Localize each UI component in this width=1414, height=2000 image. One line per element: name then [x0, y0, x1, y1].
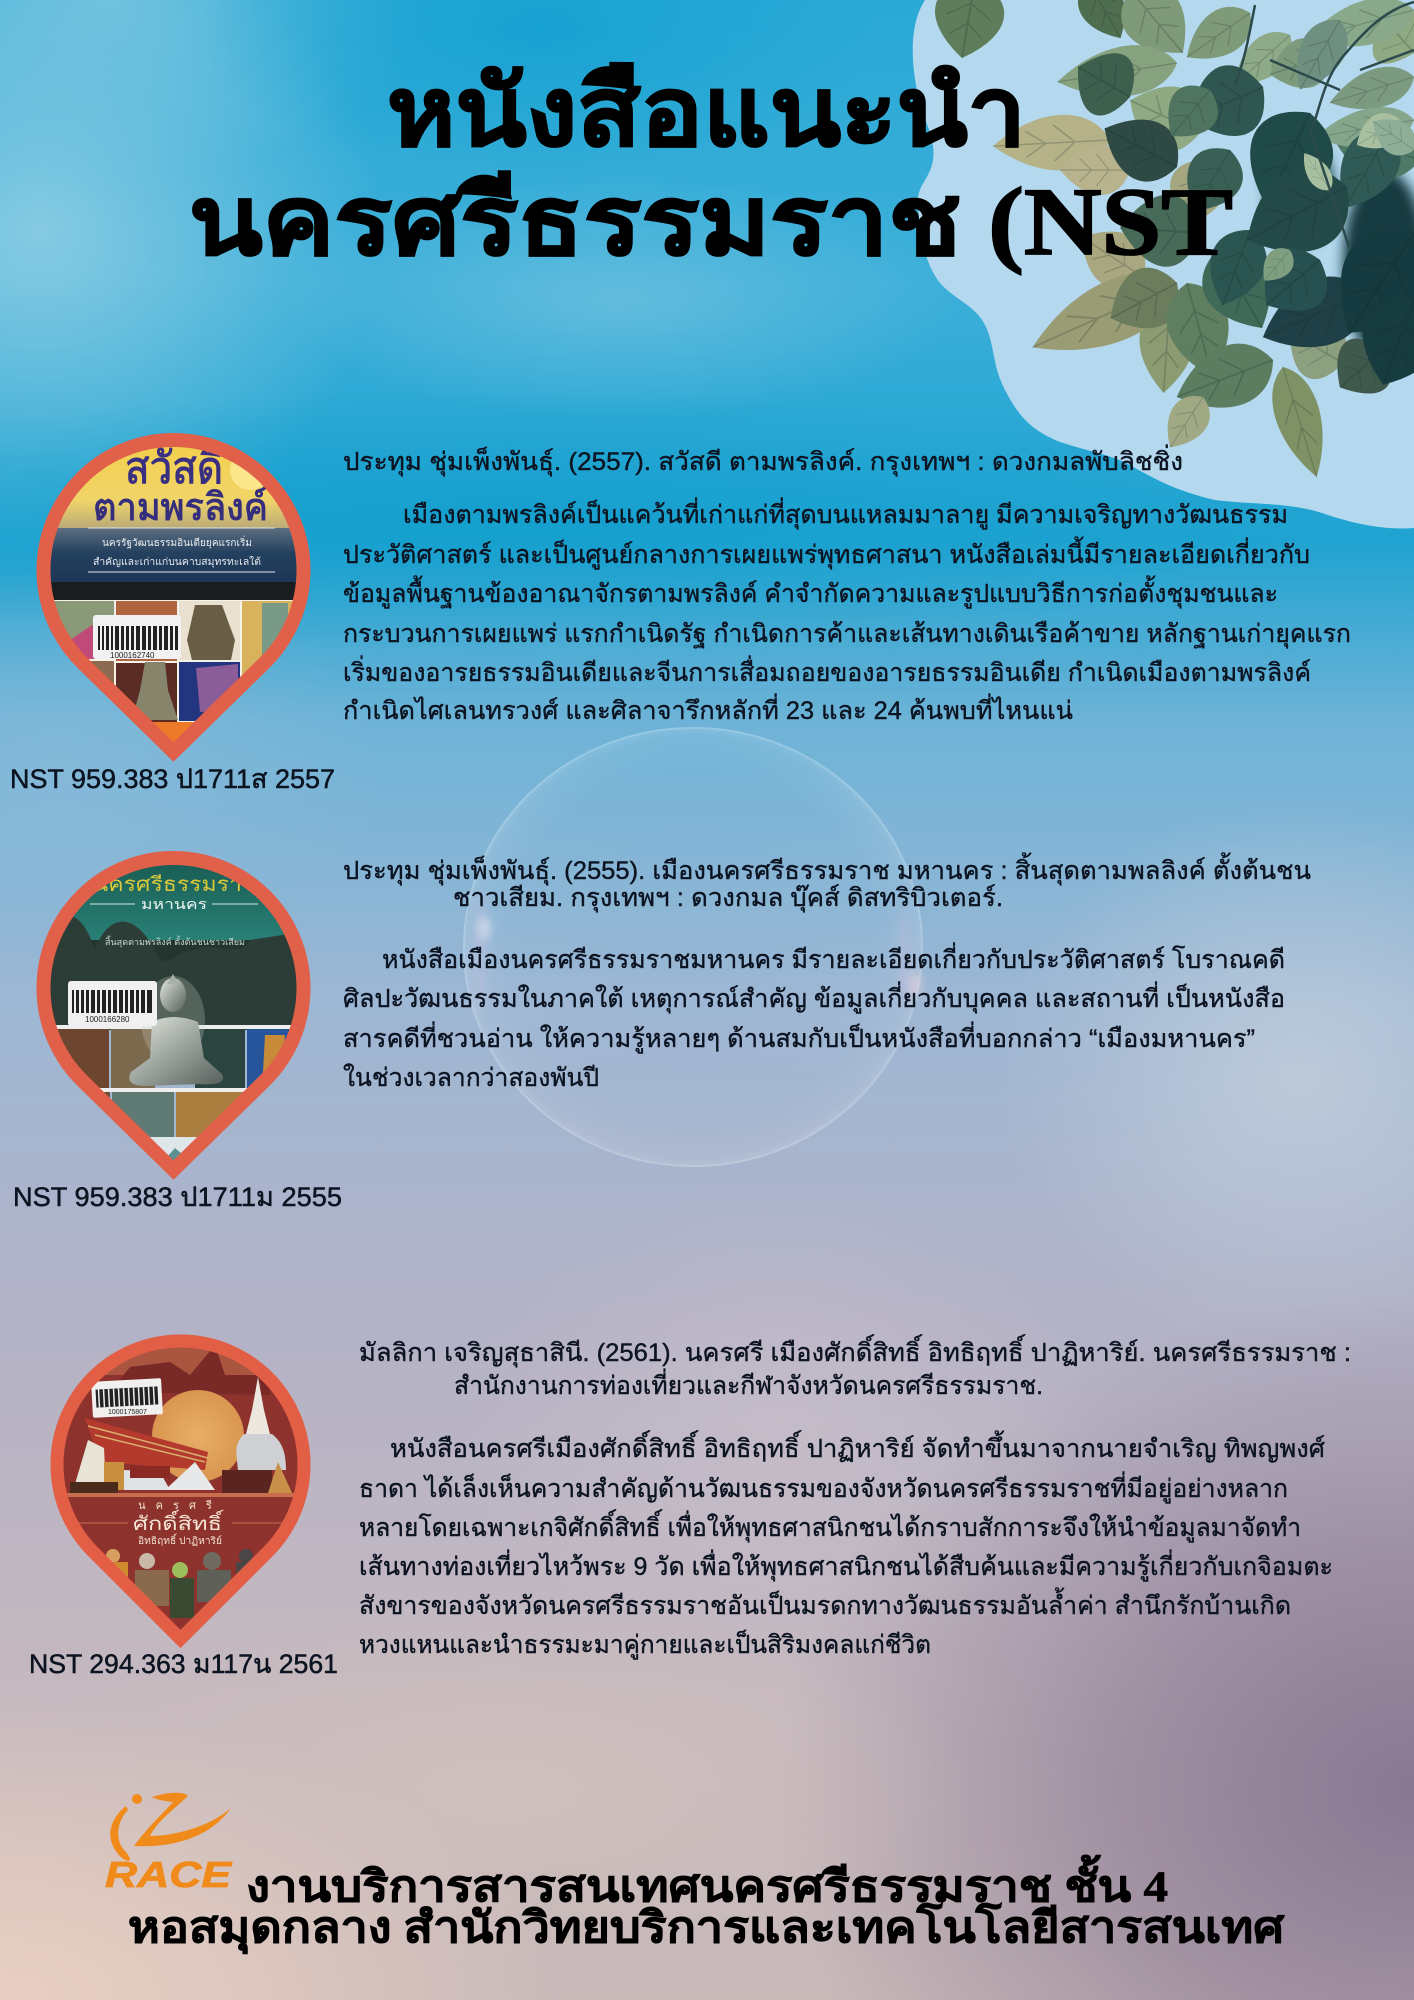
book cover pin 1: สวัสดิ	[125, 444, 223, 493]
book cover pin 3	[45, 1330, 315, 1645]
book cover pin 2: มหานคร	[141, 896, 208, 912]
footer text: งานบริการสารสนเทศนครศรีธรรมราช ชั้น 4	[246, 1854, 1168, 1911]
description 1	[343, 497, 1351, 725]
description 3: หวงแหนและนำธรรมะมาคู่กายและเป็นสิริมงคลแก่ชีวิต	[359, 1629, 931, 1660]
leaves	[928, 0, 1414, 483]
description 1: ประวัติศาสตร์ และเป็นศูนย์กลางการเผยแพร่พุทธศาสนา หนังสือเล่มนี้มีรายละเอียดเกี่ยวกับ	[343, 536, 1310, 570]
footer text: หอสมุดกลาง สำนักวิทยบริการและเทคโนโลยีสารสนเทศ	[128, 1901, 1285, 1955]
barcode: 1000175807	[108, 1409, 147, 1416]
description 1: ข้อมูลพื้นฐานข้องอาณาจักรตามพรลิงค์ คำจำกัดความและรูปแบบวิธีการก่อตั้งชุมชนและ	[343, 575, 1278, 609]
chedi	[222, 1377, 292, 1493]
description 3	[359, 1430, 1333, 1660]
description 1: กำเนิดไศเลนทรวงศ์ และศิลาจารึกหลักที่ 23 และ 24 ค้นพบที่ไหนแน่	[343, 693, 1073, 725]
call number 2: NST 959.383 ป1711ม 2555	[13, 1182, 342, 1212]
book cover pin 2: สิ้นสุดตามพรลิงค์ ตั้งต้นชนชาวเสียม	[105, 935, 245, 948]
title	[189, 59, 1233, 275]
description 3: หลายโดยเฉพาะเกจิศักดิ์สิทธิ์ เพื่อให้พุทธศาสนิกชนได้กราบสักการะจึงให้นำข้อมูลมาจัดทำ	[359, 1509, 1301, 1543]
book cover pin 1: นครรัฐวัฒนธรรมอินเดียยุคแรกเริ่ม	[102, 535, 252, 549]
book cover pin 2	[35, 850, 315, 1177]
description 3: หนังสือนครศรีเมืองศักดิ์สิทธิ์ อิทธิฤทธิ์ ปาฏิหาริย์ จัดทำขึ้นมาจากนายจำเริญ ทิพญพงศ์	[390, 1430, 1325, 1463]
citation 3	[359, 1334, 1351, 1400]
description 3: สังขารของจังหวัดนครศรีธรรมราชอันเป็นมรดกทางวัฒนธรรมอันล้ำค่า สำนึกรักบ้านเกิด	[359, 1587, 1291, 1620]
temple	[70, 1418, 215, 1493]
barcode: 1000162740	[110, 651, 155, 660]
monks	[106, 1549, 256, 1618]
description 3: ธาดา ได้เล็งเห็นความสำคัญด้านวัฒนธรรมของจังหวัดนครศรีธรรมราชที่มีอยู่อย่างหลาก	[359, 1471, 1288, 1504]
citation 2	[343, 852, 1311, 913]
barcode: 1000166280	[85, 1015, 130, 1024]
description 3: เส้นทางท่องเที่ยวไหว้พระ 9 วัด เพื่อให้พุทธศาสนิกชนได้สืบค้นและมีความรู้เกี่ยวกับเกจิอมตะ	[359, 1549, 1333, 1582]
description 2	[343, 942, 1285, 1092]
title: นครศรีธรรมราช (NST	[189, 168, 1233, 275]
panel: book 2	[13, 850, 1311, 1212]
title: หนังสือแนะนำ	[387, 59, 1026, 166]
barcode	[93, 615, 181, 660]
book cover pin 3: นครศรี	[138, 1499, 222, 1512]
description 2: หนังสือเมืองนครศรีธรรมราชมหานคร มีรายละเอียดเกี่ยวกับประวัติศาสตร์ โบราณคดี	[382, 942, 1285, 974]
book cover pin 1: ตามพรลิงค์	[93, 486, 268, 529]
logo: RACE	[105, 1793, 232, 1895]
citation 3: สำนักงานการท่องเที่ยวและกีฬาจังหวัดนครศรีธรรมราช.	[454, 1368, 1043, 1400]
citation 3: มัลลิกา เจริญสุธาสินี. (2561). นครศรี เมืองศักดิ์สิทธิ์ อิทธิฤทธิ์ ปาฏิหาริย์. นครศรีธรรมราช :	[359, 1334, 1351, 1368]
citation 2: ชาวเสียม. กรุงเทพฯ : ดวงกมล บุ๊คส์ ดิสทริบิวเตอร์.	[453, 884, 1003, 913]
call number 1: NST 959.383 ป1711ส 2557	[10, 764, 335, 794]
citation 2: ประทุม ชุ่มเพ็งพันธุ์. (2555). เมืองนครศรีธรรมราช มหานคร : สิ้นสุดตามพลลิงค์ ตั้งต้นชน	[343, 852, 1311, 886]
book cover pin 1	[35, 430, 315, 767]
bubble	[463, 727, 923, 1167]
logo: RACE: RACE	[105, 1854, 232, 1895]
call number 3: NST 294.363 ม117น 2561	[29, 1649, 338, 1679]
barcode	[91, 1378, 163, 1418]
description 1: เมืองตามพรลิงค์เป็นแคว้นที่เก่าแก่ที่สุดบนแหลมมาลายู มีความเจริญทางวัฒนธรรม	[403, 497, 1288, 530]
book cover pin 3: อิทธิฤทธิ์ ปาฏิหาริย์	[138, 1533, 222, 1547]
description 2: ในช่วงเวลากว่าสองพันปี	[343, 1063, 599, 1092]
book cover pin 2: นครศรีธรรมราช	[92, 874, 258, 896]
description 1: เริ่มของอารยธรรมอินเดียและจีนการเสื่อมถอยของอารยธรรมอินเดีย กำเนิดเมืองตามพรลิงค์	[343, 655, 1311, 687]
panel: book 3	[29, 1330, 1351, 1679]
panel: book 1	[10, 430, 1351, 794]
description 2: สารคดีที่ชวนอ่าน ให้ความรู้หลายๆ ด้านสมกับเป็นหนังสือที่บอกกล่าว “เมืองมหานคร”	[343, 1021, 1255, 1054]
buddha statue	[129, 974, 223, 1086]
citation 1: ประทุม ชุ่มเพ็งพันธุ์. (2557). สวัสดี ตามพรลิงค์. กรุงเทพฯ : ดวงกมลพับลิชชิ่ง	[343, 444, 1183, 477]
book cover pin 1: สำคัญและเก่าแก่บนคาบสมุทรทะเลใต้	[93, 556, 261, 568]
description 1: กระบวนการเผยแพร่ แรกกำเนิดรัฐ กำเนิดการค้าและเส้นทางเดินเรือค้าขาย หลักฐานเก่ายุคแรก	[343, 620, 1351, 649]
barcode	[68, 981, 157, 1026]
footer text	[128, 1854, 1285, 1955]
description 2: ศิลปะวัฒนธรรมในภาคใต้ เหตุการณ์สำคัญ ข้อมูลเกี่ยวกับบุคคล และสถานที่ เป็นหนังสือ	[343, 981, 1285, 1014]
book cover pin 3: ศักดิ์สิทธิ์	[133, 1509, 225, 1535]
cloud shape with leaves	[913, 0, 1414, 528]
